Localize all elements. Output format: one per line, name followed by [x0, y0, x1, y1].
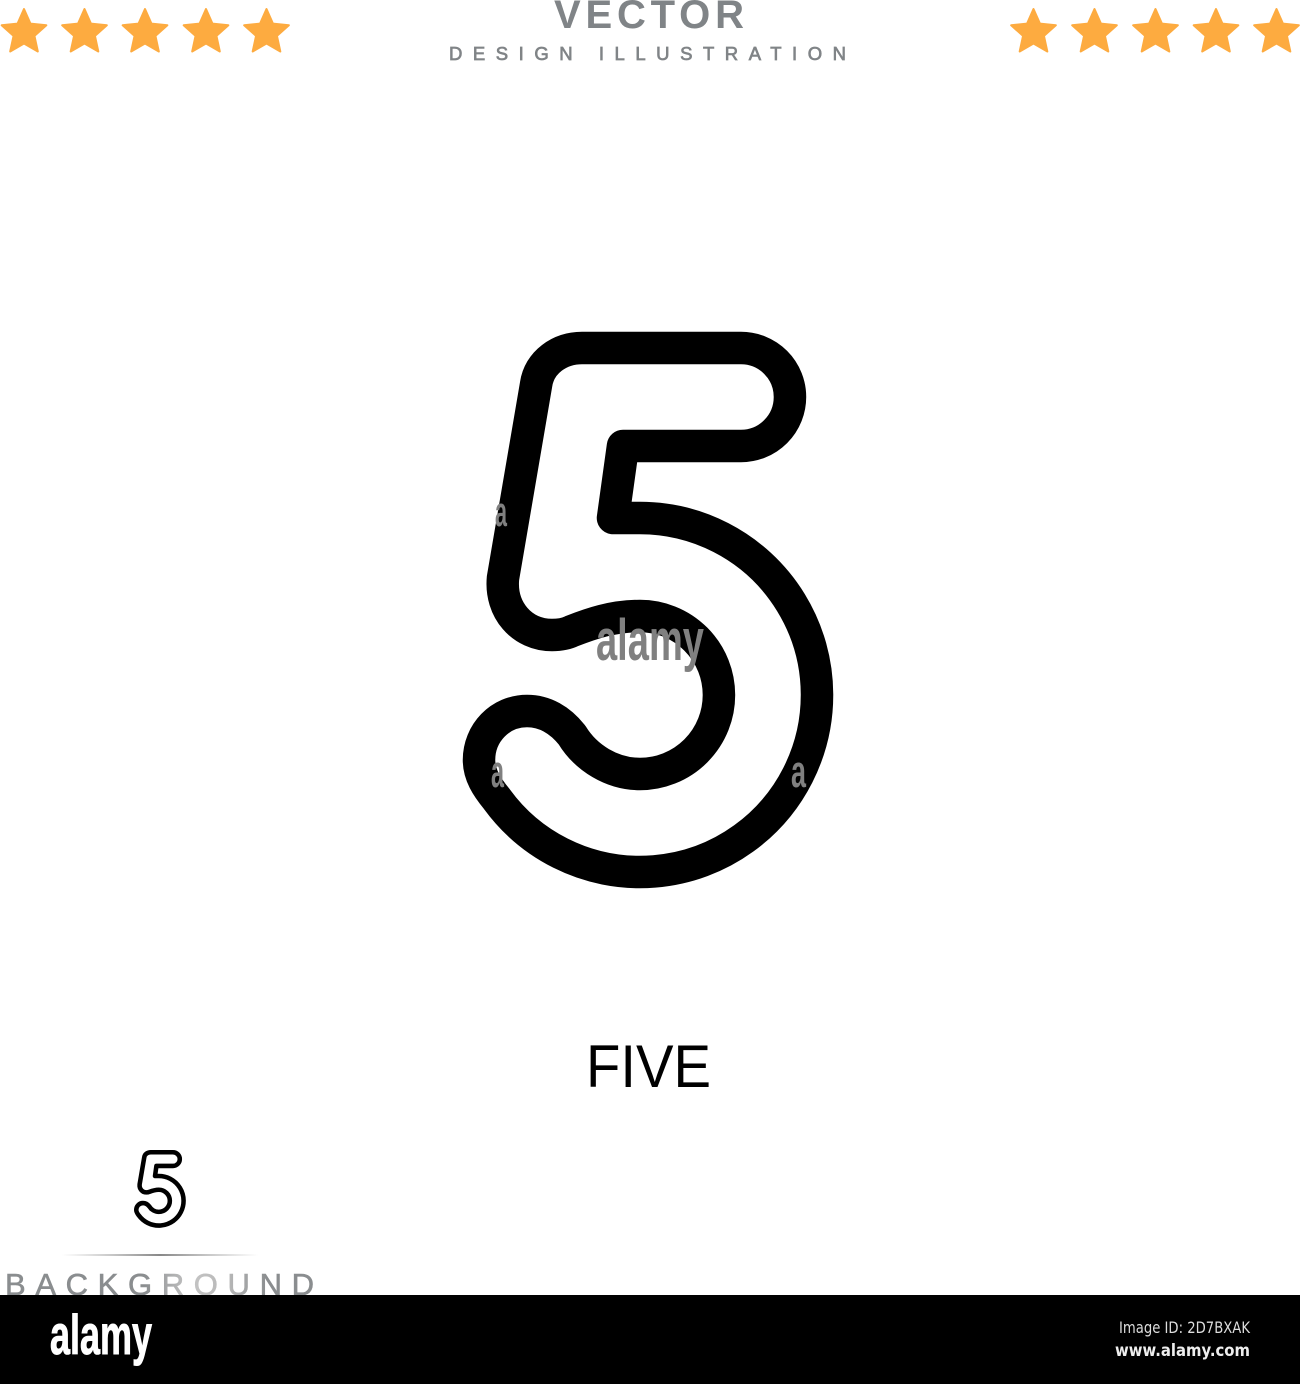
watermark: alamy over large icon: a: [491, 746, 505, 797]
watermark: alamy over large icon: a: [495, 488, 507, 535]
label: FIVE: FIVE: [586, 1033, 711, 1100]
label: BACKGROUND: BACKGROUND: [5, 1267, 314, 1302]
divider line above background label: [62, 1254, 258, 1256]
footer logo: alamy: alamy: [50, 1303, 152, 1366]
rating stars: right: [1011, 9, 1299, 52]
rating stars: left: [2, 9, 289, 52]
watermark: alamy over large icon: alamy: [596, 608, 704, 673]
icon: large outlined number five: [479, 348, 817, 872]
footer image id: Image ID: 2D7BXAK: [1119, 1318, 1250, 1337]
footer website: www.alamy.com: [1115, 1341, 1250, 1360]
icon: small outlined number five: [136, 1152, 184, 1226]
watermark: alamy over large icon: [491, 488, 807, 797]
footer bar: [0, 1295, 1300, 1384]
subheading: DESIGN ILLUSTRATION: DESIGN ILLUSTRATION: [449, 43, 846, 64]
watermark: alamy over large icon: a: [791, 746, 807, 797]
